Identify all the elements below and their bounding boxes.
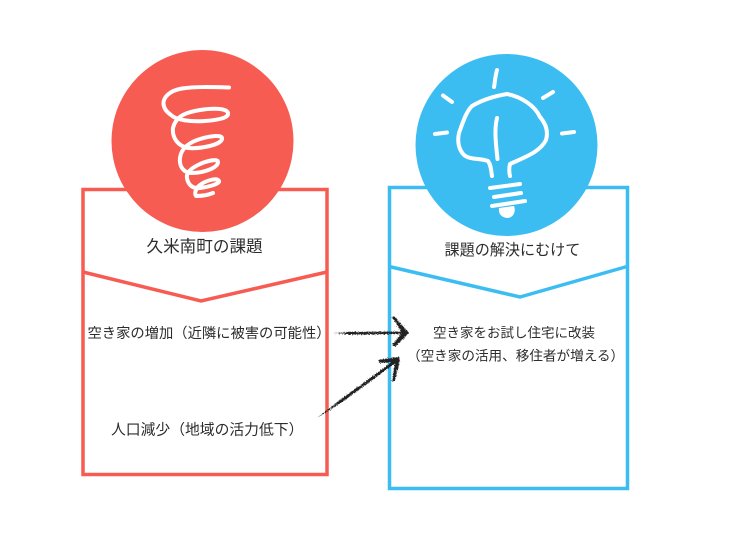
heading: solutions: 課題の解決にむけて (444, 242, 580, 259)
circle: solutions (416, 54, 598, 236)
text: population decline: 人口減少（地域の活力低下） (111, 422, 303, 438)
text: effect: （空き家の活用、移住者が増える） (407, 348, 624, 364)
panel frame: problems (83, 190, 327, 474)
arrow: vacant houses to renovation (333, 317, 409, 347)
header chevron: problems (83, 272, 327, 301)
icon: light bulb (435, 70, 574, 206)
header chevron: solutions (389, 266, 627, 297)
panel: solutions (389, 54, 628, 488)
icon: bulb tip (499, 206, 515, 218)
panel frame: solutions (390, 188, 628, 488)
text: vacant houses: 空き家の増加（近隣に被害の可能性） (88, 325, 331, 342)
panel: problems (83, 50, 331, 474)
icon: spiral (163, 87, 229, 196)
text: renovation: 空き家をお試し住宅に改装 (433, 326, 595, 340)
arrow: population decline to renovation (317, 357, 400, 418)
heading: problems: 久米南町の課題 (146, 237, 263, 256)
circle: problems (112, 50, 294, 232)
